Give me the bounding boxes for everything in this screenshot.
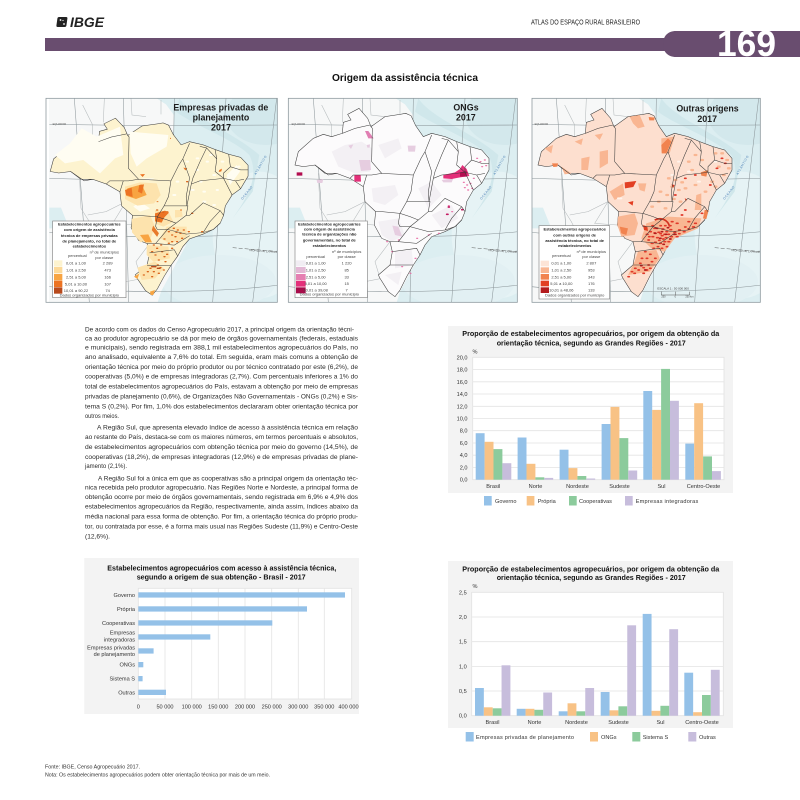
legend: empresas privadas: de planejamento, no total de — [62, 238, 117, 243]
header band with page number — [45, 23, 800, 64]
legend: outras origens: Estabelecimentos agropecuários — [543, 227, 607, 232]
body text: A Região Sul, que apresenta elevado índice de acesso à assistência técnica em relação — [97, 425, 358, 432]
legend: ONGs: 33 — [344, 274, 350, 279]
bar chart: Estabelecimentos por origem - Brasil 2017: integradoras — [104, 637, 135, 643]
bar chart: Estabelecimentos por origem - Brasil 2017: Sistema S — [110, 677, 135, 683]
legend: ONGs: técnica de organizações não — [302, 232, 357, 237]
bar chart: Proporção por Grandes Regiões (Governo, Própria, Cooperativas, Integradoras): 18,0 — [457, 368, 468, 374]
bar chart: Estabelecimentos por origem - Brasil 2017: 300 000 — [288, 704, 308, 710]
body text: jamento (2,1%). — [84, 463, 127, 470]
bar chart: Proporção por Grandes Regiões (Governo, Própria, Cooperativas, Integradoras): Nordeste — [566, 484, 589, 490]
legend: ONGs: 5,01 a 10,00 — [305, 281, 328, 286]
bar chart: Proporção por Grandes Regiões (Governo, Própria, Cooperativas, Integradoras): Proporção de estabelecimentos agropecuários, por origem da obtenção da — [462, 329, 720, 338]
bar chart: Proporção por Grandes Regiões (Empresas privadas, ONGs, Sistema S, Outras): Proporção de estabelecimentos agropecuários, por origem da obtenção da — [462, 565, 720, 574]
bar chart: Proporção por Grandes Regiões (Governo, Própria, Cooperativas, Integradoras) — [448, 326, 733, 506]
bar chart: Estabelecimentos por origem - Brasil 2017: 200 000 — [235, 704, 255, 710]
legend: outras origens: 1,01 a 2,50 — [551, 267, 572, 272]
legend: empresas privadas: estabelecimentos — [73, 243, 107, 248]
bar chart: Proporção por Grandes Regiões (Empresas privadas, ONGs, Sistema S, Outras): 0,5 — [459, 689, 467, 695]
bar chart: Proporção por Grandes Regiões (Empresas privadas, ONGs, Sistema S, Outras): 1,0 — [459, 664, 467, 670]
bar chart: Proporção por Grandes Regiões (Governo, Própria, Cooperativas, Integradoras): 20,0 — [457, 355, 468, 361]
legend: empresas privadas: 2,51 a 5,00 — [66, 274, 87, 279]
body text: obtenção ocorre por meio de órgãos governamentais, sendo registrada em 6,9% e 4,9% dos — [85, 494, 359, 501]
legend: outras origens: estabelecimentos — [558, 243, 592, 248]
legend: outras origens: 2 807 — [586, 261, 597, 266]
legend: empresas privadas: 0,01 a 1,00 — [66, 261, 87, 266]
bar chart: Proporção por Grandes Regiões (Governo, Própria, Cooperativas, Integradoras): Centro-Oeste — [687, 484, 720, 490]
bar chart: Proporção por Grandes Regiões (Governo, Própria, Cooperativas, Integradoras): 0,0 — [460, 478, 468, 484]
map title: planejamento — [193, 112, 250, 122]
bar chart: Proporção por Grandes Regiões (Governo, Própria, Cooperativas, Integradoras): 14,0 — [457, 392, 468, 398]
bar chart: Estabelecimentos por origem - Brasil 2017: 400 000 — [338, 704, 359, 710]
bar chart: Estabelecimentos por origem - Brasil 2017: Governo — [114, 593, 135, 599]
legend: empresas privadas: com origem de assistência — [64, 227, 116, 232]
bar chart: Proporção por Grandes Regiões (Governo, Própria, Cooperativas, Integradoras): 16,0 — [457, 380, 468, 386]
bar chart: Estabelecimentos por origem - Brasil 2017: de planejamento — [94, 652, 135, 658]
body text: total de estabelecimentos agropecuários do País, estavam a obtenção por meio de empresas — [85, 383, 359, 390]
legend: outras origens: por classe — [582, 254, 601, 259]
bar chart: Proporção por Grandes Regiões (Governo, Própria, Cooperativas, Integradoras): Norte — [529, 484, 542, 490]
bar chart: Estabelecimentos por origem - Brasil 2017: Cooperativas — [102, 621, 135, 627]
bar chart: Proporção por Grandes Regiões (Empresas privadas, ONGs, Sistema S, Outras): % — [472, 584, 478, 590]
bar chart: Estabelecimentos por origem - Brasil 2017: 100 000 — [182, 704, 202, 710]
map title: Empresas privadas de — [173, 102, 268, 112]
map title: ONGs — [453, 102, 479, 112]
bar chart: Proporção por Grandes Regiões (Governo, Própria, Cooperativas, Integradoras): Sudeste — [609, 484, 630, 490]
bar chart: Estabelecimentos por origem - Brasil 2017: Estabelecimentos agropecuários com acesso à assistência técnica, — [107, 563, 336, 572]
map title: Outras origens — [676, 103, 739, 113]
body text: tema S (0,2%). Por fim, 1,0% dos estabelecimentos declararam obter orientação técnica por — [85, 403, 359, 410]
bar chart: Proporção por Grandes Regiões (Governo, Própria, Cooperativas, Integradoras): 2,0 — [460, 466, 468, 472]
bar chart: Estabelecimentos por origem - Brasil 2017: segundo a origem de sua obtenção - Brasil - 2017 — [137, 572, 306, 581]
footer source and note: Fonte: IBGE, Censo Agropecuário 2017. — [45, 764, 140, 770]
legend: ONGs: 1,01 a 2,50 — [306, 267, 326, 272]
legend: chart 1: Governo — [495, 499, 516, 505]
map title — [676, 103, 739, 124]
body text: cooperativas (18,2%), de empresas integradoras (12,9%) e de empresas privadas de plane- — [85, 454, 358, 461]
legend: empresas privadas: 107 — [104, 281, 112, 286]
bar chart: Proporção por Grandes Regiões (Governo, Própria, Cooperativas, Integradoras): Brasil — [486, 484, 500, 490]
bar chart: Proporção por Grandes Regiões (Governo, Própria, Cooperativas, Integradoras): 12,0 — [457, 404, 468, 410]
bar chart: Estabelecimentos por origem - Brasil 2017 — [84, 558, 359, 714]
bar chart: Proporção por Grandes Regiões (Governo, Própria, Cooperativas, Integradoras): 6,0 — [460, 441, 468, 447]
legend: outras origens — [539, 226, 610, 299]
legend: outras origens: 343 — [588, 274, 595, 279]
legend: ONGs: nº de municípios — [332, 249, 361, 254]
page heading: Origem da assistência técnica — [332, 72, 478, 84]
header logo: IBGE: IBGE — [70, 15, 105, 30]
scale bar: 0 — [675, 296, 677, 299]
map title: 2017 — [211, 122, 231, 132]
bar chart: Proporção por Grandes Regiões (Empresas privadas, ONGs, Sistema S, Outras): 2,0 — [459, 615, 467, 621]
legend: empresas privadas: 10,01 a 90,22 — [64, 288, 89, 293]
legend: ONGs: 1 220 — [342, 261, 352, 266]
legend: outras origens: percentual — [552, 253, 571, 258]
header band with page number: 169 — [717, 23, 776, 64]
scale bar: ESCALA 1 : 50 000 000 — [657, 287, 689, 291]
legend: empresas privadas: Estabelecimentos agropecuários — [58, 221, 121, 226]
legend: empresas privadas: 166 — [104, 274, 112, 279]
bar chart: Estabelecimentos por origem - Brasil 2017: 350 000 — [314, 704, 334, 710]
legend: ONGs: 2,51 a 5,00 — [306, 274, 326, 279]
legend: empresas privadas: percentual — [68, 253, 87, 258]
map title: 2017 — [697, 114, 717, 124]
legend: outras origens: 5,01 a 10,00 — [550, 281, 573, 286]
legend: outras origens: com outras origens de — [553, 232, 597, 237]
legend: ONGs: por classe — [338, 254, 357, 259]
legend: chart 3: Empresas privadas de planejamento — [476, 735, 574, 741]
body text: ao restante do País, destaca-se com os maiores números, em termos percentuais e absolutos, — [85, 434, 358, 441]
legend: empresas privadas: nº de municípios — [90, 250, 119, 255]
legend: ONGs: percentual — [306, 254, 325, 259]
bar chart: Proporção por Grandes Regiões (Empresas privadas, ONGs, Sistema S, Outras): Sul — [656, 720, 665, 726]
bar chart: Proporção por Grandes Regiões (Empresas privadas, ONGs, Sistema S, Outras): orientação técnica, segundo as Grandes Regiões - 2017 — [497, 573, 686, 582]
body text: privadas de planejamento (0,6%), de Organizações Não Governamentais - ONGs (0,2%) e Sis- — [85, 393, 358, 400]
bar chart: Proporção por Grandes Regiões (Governo, Própria, Cooperativas, Integradoras): % — [472, 350, 478, 356]
map title — [173, 102, 268, 132]
bar chart: Proporção por Grandes Regiões (Governo, Própria, Cooperativas, Integradoras): orientação técnica, segundo as Grandes Regiões - 2017 — [497, 338, 686, 347]
legend: outras origens: 133 — [588, 287, 595, 292]
legend: empresas privadas: 74 — [105, 288, 111, 293]
legend: chart 3: ONGs — [601, 735, 617, 741]
legend: ONGs: Dados organizados por município — [300, 292, 360, 297]
legend: outras origens: 176 — [588, 281, 595, 286]
legend: chart 3 — [466, 732, 716, 742]
body text: ano analisado, equivalente a 7,6% do total. Em seguida, eram mais comuns a obtenção de — [85, 354, 358, 361]
legend: empresas privadas: por classe — [95, 255, 114, 260]
legend: outras origens: 10,01 a 48,06 — [549, 287, 574, 292]
footer source and note: Nota: Os estabelecimentos agropecuários podem obter orientação técnica por mais de um meio. — [45, 772, 270, 778]
legend: ONGs: estabelecimentos — [313, 243, 347, 248]
bar chart: Estabelecimentos por origem - Brasil 2017: 250 000 — [262, 704, 282, 710]
map title — [453, 102, 479, 123]
bar chart: Estabelecimentos por origem - Brasil 2017: Empresas privadas — [87, 646, 135, 652]
bar chart: Estabelecimentos por origem - Brasil 2017: 150 000 — [208, 704, 228, 710]
legend: chart 1: Cooperativas — [579, 499, 612, 505]
legend: ONGs: 15 — [344, 281, 350, 286]
legend: chart 1: Empresas integradoras — [636, 499, 699, 505]
panel: map Outras origens — [532, 98, 761, 303]
map title: 2017 — [456, 113, 476, 123]
legend: outras origens: Dados organizados por município — [545, 292, 605, 297]
scale bar: 250 km — [685, 296, 693, 299]
legend: outras origens: 0,01 a 1,00 — [551, 261, 572, 266]
bar chart: Estabelecimentos por origem - Brasil 2017: 50 000 — [156, 704, 174, 710]
footer source and note — [45, 764, 270, 778]
legend: ONGs: 10,01 a 39,08 — [303, 287, 329, 292]
body text: cooperativas (5,0%) e de empresas integradoras (2,7%). Com percentuais inferiores a 1% do — [85, 373, 358, 380]
legend: ONGs: com origem de assistência — [304, 226, 356, 231]
header publication title: ATLAS DO ESPAÇO RURAL BRASILEIRO — [531, 18, 640, 26]
bar chart: Proporção por Grandes Regiões (Empresas privadas, ONGs, Sistema S, Outras): 0,0 — [459, 714, 467, 720]
legend: empresas privadas: técnica de empresas privadas — [61, 233, 118, 238]
legend: chart 1 — [484, 496, 699, 506]
body text — [84, 326, 359, 540]
bar chart: Proporção por Grandes Regiões (Empresas privadas, ONGs, Sistema S, Outras): 2,5 — [459, 590, 467, 596]
bar chart: Proporção por Grandes Regiões (Empresas privadas, ONGs, Sistema S, Outras) — [448, 561, 733, 742]
body text: outros meios. — [85, 413, 119, 420]
bar chart: Estabelecimentos por origem - Brasil 2017: Própria — [117, 607, 136, 613]
body text: ca ao produtor agropecuário se dá por meio de órgãos governamentais (federais, estaduais — [85, 336, 359, 343]
body text: de estabelecimentos agropecuários com obtenção técnica por meio do governo (14,5%), de — [85, 444, 358, 451]
legend: ONGs: governamentais, no total de — [303, 238, 357, 243]
legend: outras origens: 2,51 a 5,00 — [551, 274, 572, 279]
scale bar — [657, 287, 693, 299]
scale bar: 250 — [661, 296, 666, 299]
bar chart: Proporção por Grandes Regiões (Governo, Própria, Cooperativas, Integradoras): 10,0 — [457, 416, 468, 422]
body text: De acordo com os dados do Censo Agropecuário 2017, a principal origem da orientação técni- — [85, 326, 354, 333]
bar chart: Proporção por Grandes Regiões (Governo, Própria, Cooperativas, Integradoras): 8,0 — [460, 429, 468, 435]
legend: empresas privadas — [53, 221, 126, 298]
body text: média nacional para essa forma de obtenção. Por fim, a orientação técnica do próprio produ- — [85, 513, 358, 520]
panel: map ONGs — [288, 98, 518, 303]
legend: chart 1: Própria — [538, 499, 557, 505]
bar chart: Proporção por Grandes Regiões (Empresas privadas, ONGs, Sistema S, Outras): 1,5 — [459, 640, 467, 646]
bar chart: Estabelecimentos por origem - Brasil 2017: ONGs — [119, 663, 135, 669]
legend: empresas privadas: 2 289 — [103, 261, 113, 266]
legend: chart 3: Outras — [699, 735, 716, 741]
body text: orientação técnica por meio do próprio produtor ou por técnico contratado por este (6,2%), de — [85, 364, 358, 371]
legend: outras origens: 953 — [588, 267, 595, 272]
bar chart: Proporção por Grandes Regiões (Empresas privadas, ONGs, Sistema S, Outras): Norte — [528, 720, 541, 726]
legend: ONGs: 85 — [344, 267, 350, 272]
bar chart: Proporção por Grandes Regiões (Empresas privadas, ONGs, Sistema S, Outras): Sudeste — [608, 720, 629, 726]
legend: ONGs: 7 — [346, 287, 349, 292]
legend: empresas privadas: 473 — [104, 268, 112, 273]
body text: A Região Sul foi a única em que as cooperativas são a principal origem da orientação téc- — [98, 476, 358, 483]
bar chart: Proporção por Grandes Regiões (Empresas privadas, ONGs, Sistema S, Outras): Nordeste — [565, 720, 588, 726]
bar chart: Estabelecimentos por origem - Brasil 2017: Empresas — [110, 631, 135, 637]
bar chart: Estabelecimentos por origem - Brasil 2017: 0 — [137, 704, 140, 710]
legend: empresas privadas: Dados organizados por município — [60, 292, 120, 297]
legend: ONGs: 0,01 a 1,00 — [306, 261, 326, 266]
bar chart: Proporção por Grandes Regiões (Governo, Própria, Cooperativas, Integradoras): Sul — [657, 484, 666, 490]
legend: ONGs — [295, 221, 367, 298]
legend: ONGs: Estabelecimentos agropecuários — [298, 221, 361, 226]
bar chart: Estabelecimentos por origem - Brasil 2017: Outras — [118, 690, 135, 696]
body text: e municipais), sendo registrada em 388,1 mil estabelecimentos agropecuários do País, no — [85, 345, 358, 352]
header logo: IBGE — [56, 15, 105, 30]
bar chart: Proporção por Grandes Regiões (Empresas privadas, ONGs, Sistema S, Outras): Centro-Oeste — [685, 720, 719, 726]
body text: tor, ou contratada por esse, é a forma mais usual nas Regiões Sudeste (11,9%) e Centro-Oeste — [85, 523, 358, 530]
body text: (12,6%). — [85, 533, 110, 540]
body text: nica recebida pelo produtor agropecuário. Nas Regiões Norte e Nordeste, a principal forma de — [85, 485, 358, 492]
panel: map Empresas privadas de planejamento — [46, 98, 278, 303]
body text: estabelecimentos agropecuários da Região, respectivamente, ainda assim, índices abaixo da — [85, 503, 358, 510]
legend: empresas privadas: 1,01 a 2,50 — [66, 268, 87, 273]
legend: outras origens: nº de municípios — [577, 249, 606, 254]
legend: chart 3: Sistema S — [643, 735, 668, 741]
legend: empresas privadas: 5,01 a 10,00 — [65, 281, 88, 286]
legend: outras origens: assistência técnica, no total de — [545, 238, 605, 243]
bar chart: Proporção por Grandes Regiões (Empresas privadas, ONGs, Sistema S, Outras): Brasil — [486, 720, 500, 726]
bar chart: Proporção por Grandes Regiões (Governo, Própria, Cooperativas, Integradoras): 4,0 — [460, 453, 468, 459]
